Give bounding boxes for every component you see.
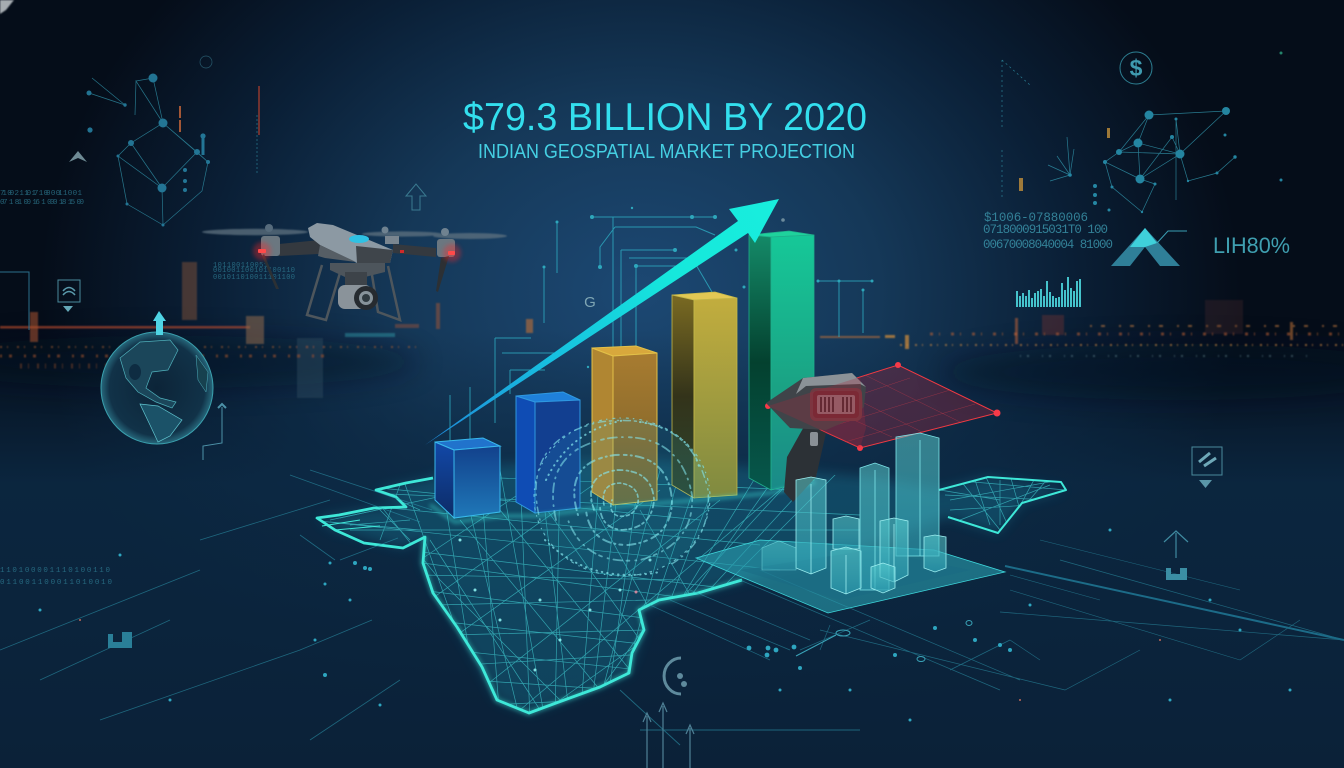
map halo <box>317 458 1066 713</box>
drone lights <box>253 242 461 262</box>
building back <box>860 463 889 590</box>
icon: bottom left bracket <box>108 632 132 648</box>
glow at bar feet <box>430 482 815 522</box>
icon: chevron left <box>69 151 87 162</box>
building right <box>924 535 946 572</box>
binary text block left: 07 1 81 00 16 1 000 18 15 00 <box>0 199 84 207</box>
building slim left <box>796 477 826 574</box>
city skyline right <box>820 300 1344 356</box>
map nodes <box>458 538 652 672</box>
binary text block right: 00670008040004 81000 <box>983 238 1113 252</box>
arrow: globe up <box>153 311 166 335</box>
bar 5 green <box>749 231 814 490</box>
logo label: LIH80% <box>1213 233 1290 258</box>
binary text block left: 0 0 1 0 0 1 1 0 0 1 0 1 1 0 0 1 1 0 <box>213 267 295 275</box>
drone landing gear <box>307 265 400 320</box>
binary text block left: 71 00 2 1 10 17 1 00 0 01 1 0 0 1 <box>0 190 82 198</box>
icon: dollar coin: $ <box>1130 55 1143 81</box>
icon: dollar coin <box>1120 52 1152 84</box>
icon: left square panel <box>58 280 80 312</box>
red scan plane <box>765 362 1000 451</box>
binary text block left <box>0 190 295 587</box>
drone camera <box>338 272 378 310</box>
map mesh <box>300 470 1066 720</box>
binary text block left: 1 1 0 1 0 0 0 0 1 1 1 0 1 0 0 1 1 0 <box>0 567 110 575</box>
swirling data globe <box>534 418 710 576</box>
map outline glow <box>423 537 742 713</box>
binary text block right <box>983 211 1113 252</box>
building low front <box>871 563 895 593</box>
bar chart <box>430 231 815 522</box>
scanner beam tint <box>768 377 866 448</box>
scattered data points <box>38 528 1292 722</box>
growth arrow <box>425 199 779 445</box>
icon: bottom center glyph <box>664 658 687 694</box>
binary text block right: $1006-07880006 <box>984 211 1088 225</box>
binary text block left: 0 0 1 0 1 1 0 1 0 0 1 1 1 0 1 1 0 0 <box>213 274 295 282</box>
icon: arrow up near drone <box>406 184 426 210</box>
network constellation top right <box>1002 52 1282 213</box>
circuit traces behind chart <box>450 207 874 445</box>
icon: right lower bracket <box>1166 568 1187 580</box>
drone body <box>308 223 393 277</box>
icon: right square panel <box>1192 447 1222 488</box>
bar 1 blue <box>435 438 500 518</box>
drone arms and motors <box>261 224 455 292</box>
binary text block left: 1 0 1 1 0 0 1 1 0 0 5 1 <box>213 262 268 270</box>
arrow: thin circuit up <box>203 404 226 460</box>
title: $79.3 BILLION BY 2020 <box>463 96 867 139</box>
city skyline left <box>0 262 533 398</box>
building cube front <box>831 547 861 594</box>
map outline <box>317 477 1066 713</box>
icon: bottom center up arrows <box>643 703 694 768</box>
logo mark <box>1111 228 1187 266</box>
left globe <box>101 332 213 444</box>
building small back left <box>762 541 796 570</box>
left framed panel <box>0 272 29 330</box>
binary text block right: 0718000915031T0 100 <box>983 223 1108 237</box>
handheld scanner <box>766 373 866 502</box>
bar 4 olive gold <box>672 292 737 498</box>
drone <box>202 223 507 320</box>
icon: small G glyph behind chart: G <box>584 294 596 311</box>
building small <box>833 516 859 549</box>
building mid right <box>880 518 908 582</box>
India map <box>300 458 1066 720</box>
icon: right lower chevron arrow <box>1164 531 1188 558</box>
bar 3 gold <box>592 346 657 505</box>
mini bar chart right <box>1016 277 1081 307</box>
subtitle: INDIAN GEOSPATIAL MARKET PROJECTION <box>478 140 855 163</box>
network constellation top left <box>86 56 259 226</box>
binary text block left: 0 1 1 0 0 1 1 0 0 0 1 1 0 1 0 0 1 0 <box>0 579 112 587</box>
holographic city platform <box>696 433 1005 613</box>
drone rotors <box>202 229 507 239</box>
scanner head <box>766 373 866 430</box>
building tall <box>896 433 939 556</box>
scanner screen <box>810 388 862 421</box>
ring markers <box>796 620 972 662</box>
decorative circuit lines lower field <box>0 470 1344 745</box>
scanner handle <box>784 423 826 502</box>
bar 2 blue <box>516 392 580 513</box>
